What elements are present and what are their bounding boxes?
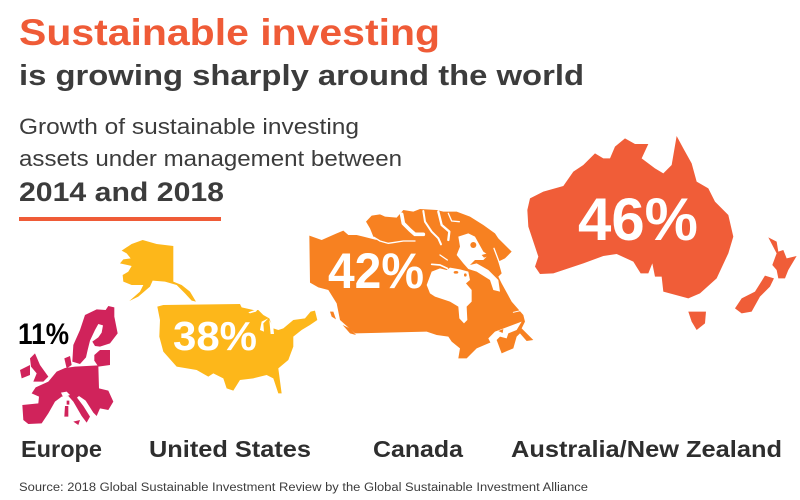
- map: United States: [120, 240, 317, 393]
- region labels: Europe: [21, 436, 102, 462]
- Arctic channels: [374, 211, 523, 312]
- Foxe Basin and Hudson Strait: [457, 233, 500, 292]
- New Zealand North Island: [768, 237, 797, 278]
- Ireland: [20, 365, 30, 378]
- value: Canada 42%: 42%: [328, 243, 424, 299]
- Denmark: [64, 356, 72, 368]
- map: Canada: [309, 209, 533, 358]
- Canada silhouette: [309, 209, 533, 358]
- map: Australia and New Zealand: [527, 136, 797, 330]
- Alaska: [120, 240, 196, 302]
- value: United States 38%: 38%: [173, 313, 257, 359]
- Mediterranean islands: [64, 401, 80, 425]
- Baltic states: [94, 350, 110, 367]
- intro text: Growth of sustainable investing: [19, 114, 359, 139]
- map: Europe: [20, 306, 118, 425]
- region labels: Australia/New Zealand: [511, 436, 782, 462]
- Tasmania: [688, 312, 706, 330]
- small islands: [454, 242, 503, 333]
- value: Europe 11%: 11%: [18, 318, 69, 351]
- source note: Source: 2018 Global Sustainable Investment Review by the Global Sustainable Investment Alliance: [19, 482, 588, 494]
- Scandinavia: [72, 306, 118, 364]
- intro text: assets under management between: [19, 146, 402, 171]
- title: Sustainable investing: [19, 12, 440, 53]
- region labels: [21, 436, 782, 462]
- subtitle: is growing sharply around the world: [19, 60, 584, 92]
- intro text: [19, 114, 402, 207]
- region labels: Canada: [373, 436, 463, 462]
- Australia: [527, 136, 733, 298]
- contiguous states: [157, 304, 317, 393]
- Hudson Bay: [427, 268, 472, 323]
- value: Australia/New Zealand 46%: 46%: [578, 186, 698, 253]
- New Zealand South Island: [735, 276, 774, 313]
- Great Britain: [30, 353, 48, 382]
- continental mainland: [22, 365, 113, 424]
- west coast islands: [330, 312, 356, 335]
- intro text: 2014 and 2018: [19, 177, 224, 207]
- Gulf of St Lawrence: [488, 322, 522, 345]
- region labels: United States: [149, 436, 311, 462]
- Alps gap: [61, 392, 70, 398]
- heading underline: [19, 217, 221, 221]
